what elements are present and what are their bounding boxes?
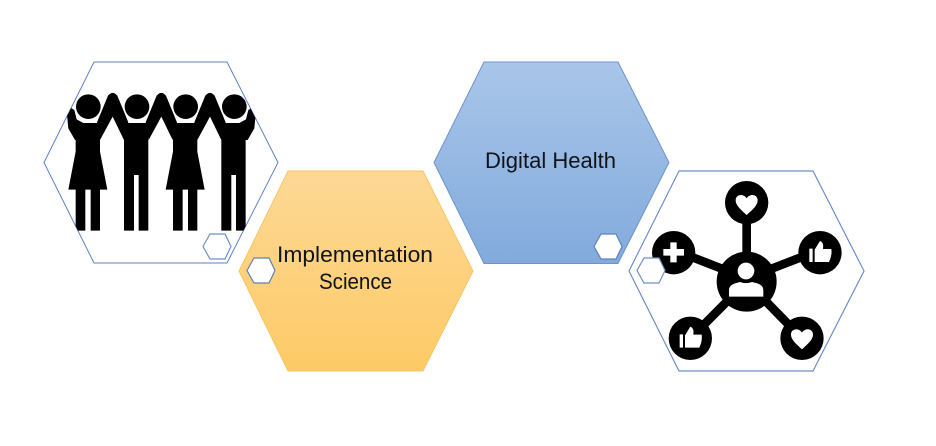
icon: people holding hands <box>66 93 257 231</box>
small hexagon marker <box>594 234 622 259</box>
small hexagon marker <box>247 258 275 283</box>
infographic canvas <box>44 62 865 372</box>
panel: implementation science hexagon <box>239 171 473 371</box>
label: digital health: Digital Health <box>485 148 616 173</box>
hexagon outline: network <box>629 171 864 371</box>
label: implementation science: Science <box>319 269 392 294</box>
label: implementation science <box>277 242 433 294</box>
hexagon: implementation science <box>239 171 473 371</box>
label: implementation science: Implementation <box>277 242 433 267</box>
panel: social network hexagon <box>629 171 864 371</box>
hexagon: digital health <box>434 62 669 264</box>
panel: digital health hexagon <box>434 62 669 264</box>
small hexagon marker <box>637 258 665 283</box>
panel: community hexagon <box>44 62 278 263</box>
hexagon outline: community <box>44 62 278 263</box>
small hexagon marker <box>203 234 231 259</box>
icon: social network <box>652 181 842 360</box>
